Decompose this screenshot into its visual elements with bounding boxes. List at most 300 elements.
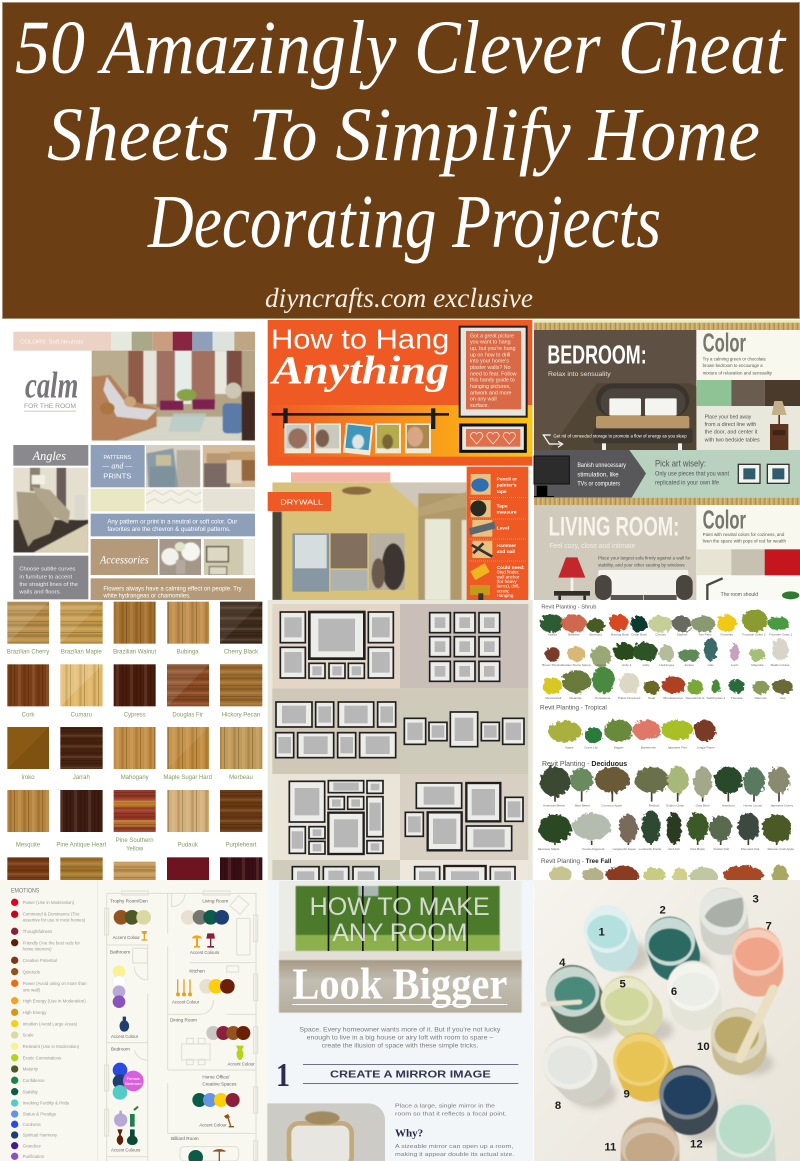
room: home office — [192, 1074, 240, 1128]
shrub labels row 2: Brown Photinia — [542, 663, 563, 667]
photo: flowers — [159, 539, 201, 575]
deciduous labels row 2: Kousa Dogwood — [582, 847, 605, 851]
step text: room so that it reflects a focal point. — [395, 1111, 507, 1117]
deciduous trees row 1 — [540, 766, 790, 802]
gallery layout 4 — [404, 712, 524, 747]
shrub labels row 1: Acacia — [548, 633, 557, 637]
tool labels: Hammer — [497, 543, 516, 549]
bed placement tip: with two bedside tables — [704, 438, 760, 444]
room: billiard room — [171, 1136, 226, 1161]
emotions legend: Exotic Connotations — [23, 1055, 61, 1060]
title: look bigger: Look Bigger — [292, 959, 507, 1008]
shrub labels row 2: Juniper — [684, 663, 694, 667]
living room heading: LIVING ROOM: — [549, 512, 679, 542]
step text: making it appear double its actual size. — [395, 1152, 515, 1158]
jar 12 — [659, 1067, 715, 1119]
row 2 labels — [22, 712, 260, 718]
room: bathroom: Bathroom — [110, 950, 130, 955]
emotions legend: Coolness — [23, 1122, 41, 1127]
emotions legend: Stability — [23, 1089, 39, 1094]
room: billiard room: Billiard Room — [171, 1136, 199, 1141]
room: bedroom: Bedroom — [125, 1081, 142, 1086]
shrub labels row 2: Magnolia — [751, 663, 764, 667]
paint sticks — [740, 989, 773, 1058]
panel: bedroom and living room — [534, 320, 800, 600]
gallery layout 8 — [415, 866, 515, 887]
icon: monitor — [534, 456, 569, 497]
emotions legend: home interiors) — [23, 947, 52, 952]
row 5 swatches — [7, 857, 262, 880]
subtitle: diyncrafts.com exclusive — [265, 283, 533, 313]
accessories text: Flowers always have a calming effect on people. Try — [103, 586, 242, 592]
emotions legend: Scale — [23, 1033, 34, 1038]
tips band: TVs or computers — [577, 481, 621, 488]
paint jars — [543, 888, 782, 1161]
row 4 labels: Yellow — [126, 847, 144, 853]
tips band: Banish unnecessary — [577, 462, 627, 469]
room: kitchen: Accent Colour — [172, 1000, 200, 1005]
row 3 swatches — [7, 727, 262, 769]
row 3 labels: Merbeau — [229, 775, 253, 781]
shrub labels row 2: Holly — [643, 663, 650, 667]
shrub labels row 3: Sweetshrub D. — [685, 696, 705, 700]
frame: intro: this handy guide to — [470, 378, 515, 384]
shrub labels row 1: Forsythia — [720, 633, 733, 637]
shrub labels row 3 — [545, 696, 786, 700]
icon: lamp and table — [770, 401, 788, 450]
living room colour card: Paint with neutral colors for coziness, and — [703, 532, 785, 537]
shrub labels row 3: Viburnum — [754, 696, 768, 700]
shrub labels row 1: Century — [655, 633, 666, 637]
shrub labels row 3: Switchgrass 3 — [706, 696, 725, 700]
tool labels: (for heavy — [497, 579, 517, 584]
emotions legend: Status & Prestige — [23, 1112, 57, 1117]
room: kitchen — [172, 969, 235, 1005]
row 4 labels: Purpleheart — [226, 842, 257, 848]
room: living room: Accent Colours — [190, 950, 219, 955]
living room block — [534, 505, 696, 600]
room: living room: Living Room — [202, 899, 228, 904]
patterns and prints heading — [91, 445, 145, 487]
row 1 labels: Cherry Black — [224, 649, 258, 655]
curtain rod with photos — [272, 408, 449, 455]
room: trophy room — [110, 899, 151, 941]
intro text — [299, 1027, 500, 1049]
panel: paint jars photo — [534, 880, 800, 1161]
row 1 labels — [7, 649, 258, 655]
sofa tip: Place your largest sofa firmly against a wall for — [598, 556, 691, 561]
emotions legend: Creative Potential — [23, 958, 57, 963]
bed placement tip: the door, and center it — [705, 430, 758, 436]
heading script: Anything — [269, 347, 449, 392]
frame: intro — [460, 327, 527, 417]
accessories heading — [91, 539, 158, 575]
shrub labels row 2: Holly 2 — [622, 663, 632, 667]
angles text: the straight lines of the — [19, 582, 78, 588]
deciduous labels row 2: Red Maple — [690, 847, 705, 851]
bedroom colour card: Try a calming green or chocolate — [703, 357, 767, 362]
living room colour card: The room should — [721, 592, 758, 598]
tool labels: measure — [497, 509, 517, 515]
frame: intro: up on how to drill — [470, 352, 510, 358]
tree fall row — [549, 865, 788, 885]
photo: wall frames — [204, 539, 255, 575]
shrub labels row 2 — [542, 663, 790, 667]
shrub labels row 2: Hibiscus — [595, 663, 607, 667]
living room colour card: liven the space with pops of red for wealth — [703, 539, 787, 544]
deciduous labels row 2 — [537, 847, 794, 851]
jar 1 — [584, 905, 631, 953]
angles text: walls and floors. — [18, 589, 62, 595]
room: living room — [181, 899, 229, 955]
layout cell backgrounds — [272, 604, 528, 880]
emotions legend: Purification — [23, 1154, 45, 1159]
intro text: create the illusion of space with these simple tricks. — [322, 1043, 479, 1049]
shrub labels row 3: Oleander — [569, 696, 582, 700]
emotions legend: High Energy — [23, 1010, 47, 1015]
panel: how to hang anything — [268, 320, 532, 600]
living room colour card — [697, 504, 800, 600]
tropical labels: Bottlebrush — [641, 746, 656, 750]
emotions legend: Restraint (Use in Moderation) — [23, 1044, 80, 1049]
tips band: replicated in your own life — [655, 480, 719, 487]
living room subheading: Feel cozy, close and intimate — [549, 541, 635, 550]
gallery layout 6 — [405, 783, 523, 851]
row 3 labels: Iroko — [21, 775, 35, 781]
emotions legend: Maturity — [23, 1067, 39, 1072]
frame: intro: you want to hang — [470, 340, 511, 346]
deciduous labels row 1: Hawthorn — [722, 804, 735, 808]
calm heading — [24, 364, 78, 412]
row 4 labels: Pine Antique Heart — [56, 842, 107, 848]
shrub labels row 3: Yew — [780, 696, 786, 700]
step heading: CREATE A MIRROR IMAGE — [330, 1070, 491, 1081]
shrub labels row 1: Fountain Grass 2 — [742, 633, 766, 637]
emotions legend — [11, 899, 87, 1160]
room: bathroom — [110, 950, 139, 1039]
deciduous labels row 2: Lombardy Poplar — [639, 847, 661, 851]
jar numbers: 1 — [599, 927, 605, 939]
row 4 swatches — [7, 790, 262, 832]
bed placement tip: Place your bed away — [705, 414, 751, 420]
tropical labels: Jungle Flame — [697, 746, 715, 750]
frame: hearts — [461, 425, 525, 451]
emotions legend: Friendly (Are the best reds for — [23, 940, 80, 945]
bedroom colour card — [697, 328, 800, 406]
room: kitchen: Kitchen — [189, 969, 205, 974]
living room colour card: Color — [703, 504, 746, 534]
angles text: Choose subtle curves — [19, 566, 75, 572]
room: dining room — [170, 1018, 255, 1067]
pink tape — [291, 472, 390, 482]
deciduous labels row 1: Japanese Cherry — [770, 804, 794, 808]
row 4 labels — [16, 838, 257, 853]
shrubs row 1 — [540, 609, 789, 633]
orange hero — [268, 320, 532, 466]
emotions legend: Grandeur — [23, 1143, 42, 1148]
tips band: Only use pieces that you want — [655, 471, 729, 478]
room: trophy room: Trophy Room/Den — [110, 899, 148, 904]
frame: intro: plaster walls? No — [470, 365, 511, 371]
photo: pillows — [202, 445, 255, 488]
drywall label — [268, 492, 331, 511]
emotions legend: assertive for use in most homes) — [23, 918, 86, 923]
jar numbers: 4 — [559, 957, 566, 969]
deciduous labels row 1: Redbud — [649, 804, 660, 808]
icon: red lamp — [554, 557, 590, 600]
tool labels: and nail — [497, 549, 515, 555]
row 2 labels: Cypress — [124, 712, 146, 718]
frame: intro: into your home's — [470, 359, 509, 365]
emotions legend: Thoughtfulness — [23, 929, 52, 934]
room: bedroom — [111, 1047, 144, 1153]
row 2 swatches — [7, 664, 262, 706]
deciduous labels row 1: Honey Locust — [743, 804, 762, 808]
step text: A sizeable mirror can open up a room, — [395, 1144, 514, 1150]
accessories text: white hydrangeas or chamomiles. — [102, 594, 191, 600]
panel: colour emotions floor plan — [0, 880, 268, 1161]
photo: striped chair — [146, 445, 200, 488]
patterns text — [91, 514, 255, 536]
wood strip — [534, 498, 800, 505]
intro text: Space. Every homeowner wants more of it. But if you're not lucky — [299, 1027, 500, 1033]
photo: drywall room — [272, 482, 467, 600]
hero photo — [279, 881, 522, 1013]
accessories heading: Accessories — [99, 552, 149, 566]
heading: shrub: Revit Planting - Shrub — [541, 605, 596, 611]
emotions legend: Command & Dominance (Too — [23, 911, 80, 916]
emotions legend: Power (Avoid using on more than — [23, 981, 87, 986]
row 1 labels: Brazilian Walnut — [113, 649, 157, 655]
jar 4 — [546, 967, 599, 1017]
shrubs row 2 — [545, 638, 789, 667]
jar numbers: 7 — [766, 920, 772, 932]
jar numbers: 6 — [671, 986, 677, 998]
deciduous labels row 2: Shumard Oak — [741, 847, 760, 851]
tool labels: Stud finder, — [497, 570, 519, 575]
patterns text: favorites are the chevron & quatrefoil patterns. — [107, 527, 231, 533]
mirror photo — [268, 1103, 385, 1161]
art frames — [738, 464, 789, 483]
icon: bed — [593, 383, 693, 450]
jar numbers — [555, 894, 772, 1154]
bedroom colour card: Color — [703, 328, 746, 358]
tool labels — [497, 477, 525, 598]
deciduous labels row 1: Blue Beech — [575, 804, 591, 808]
panel: calm for the room — [13, 332, 255, 600]
row 2 labels: Hickory Pecan — [222, 712, 260, 718]
colour bar: COLORS: Soft Neutrals — [20, 339, 84, 345]
shrubs row 3 — [542, 667, 793, 695]
deciduous labels row 1 — [543, 804, 794, 808]
emotions legend: Invoking Fertility & Pride — [23, 1101, 70, 1106]
jar numbers: 5 — [620, 978, 626, 990]
gallery layout 1 — [280, 612, 393, 678]
heading: How to Hang — [271, 323, 449, 354]
room: home office: Home Office/ — [202, 1074, 230, 1079]
patterns text: Any pattern or print in a neutral or soft color. Our — [107, 519, 237, 525]
panel: hardwood species — [7, 602, 262, 880]
row 3 labels: Maple Sugar Hard — [163, 775, 212, 781]
tool labels: wall anchor — [497, 574, 520, 579]
tropical labels: Dagger — [614, 746, 624, 750]
row 1 swatches — [7, 602, 262, 644]
jar numbers: 11 — [604, 1142, 616, 1154]
deciduous labels row 1: Gray Birch — [696, 804, 710, 808]
room: dining room: Accent Colour — [227, 1062, 255, 1067]
frame: intro: Got a great picture — [470, 333, 514, 339]
photo: living room — [92, 350, 255, 441]
tool labels: screw, — [497, 588, 509, 593]
frame: intro: up, but you're hung — [470, 346, 515, 352]
tips band: stimulation, like — [577, 471, 619, 478]
angles heading — [13, 445, 88, 466]
tool labels: tape — [497, 489, 507, 495]
room: trophy room: Accent Colour — [113, 935, 140, 940]
heading: deciduous: Revit Planting - Deciduous — [542, 761, 627, 768]
emotions legend: Power (Use in Moderation) — [23, 900, 75, 905]
step number: 1 — [276, 1057, 290, 1094]
shrub labels row 2: Lilac — [708, 663, 714, 667]
shrub labels row 1: Barberry — [568, 633, 580, 637]
intro text: enough to live in a big house or airy loft with room to spare – — [307, 1036, 494, 1042]
deciduous labels row 1: American Beech — [543, 804, 565, 808]
bed placement tip: from a direct line with — [705, 422, 756, 428]
shrub labels row 2: Lupin — [731, 663, 739, 667]
tool labels: items), drill, — [497, 584, 520, 589]
tropical labels: Japanese Fern — [667, 746, 688, 750]
shrub labels row 3: Ponsettena — [595, 696, 611, 700]
jar numbers: 9 — [624, 1088, 630, 1100]
tropical labels — [565, 746, 715, 750]
icon: arrow — [543, 435, 563, 447]
step text: Place a large, single mirror in the — [395, 1103, 495, 1109]
angles text: in furniture to accent — [19, 574, 73, 580]
tool labels: Hanging — [497, 593, 514, 598]
emotions legend: Intuition (Avoid Large Areas) — [23, 1021, 78, 1026]
bedroom colour card: mixture of relaxation and sensuality — [703, 370, 773, 375]
shrub labels row 2: Golden Flame Spirea — [562, 663, 591, 667]
jar numbers: 12 — [690, 1138, 703, 1150]
tool labels: Level — [497, 526, 509, 532]
step text — [395, 1103, 515, 1158]
shrub labels row 3: Rhododendron — [663, 696, 684, 700]
tips band: Pick art wisely: — [655, 459, 706, 469]
bed placement tip — [697, 401, 800, 450]
jar 10 — [711, 1008, 766, 1062]
tool icons — [469, 474, 496, 600]
row 1 labels: Brazilian Maple — [61, 649, 102, 655]
shrub labels row 1: Fan Palm — [699, 633, 712, 637]
frame: intro: surface. — [470, 403, 489, 409]
jar 9 — [613, 1034, 668, 1086]
tool labels: Tape — [497, 503, 508, 509]
icon: sofa — [595, 570, 693, 600]
patterns and prints heading: PRINTS — [103, 472, 131, 481]
tropical labels: Agave — [565, 746, 574, 750]
bedroom block — [534, 330, 696, 450]
deciduous labels row 2: Largetooth Aspen — [613, 847, 636, 851]
storage tip: Get rid of unneeded storage to promote a flow of energy as you sleep — [553, 433, 687, 438]
shrub labels row 1: Burning Bush — [611, 633, 629, 637]
row 1 labels: Brazilian Cherry — [7, 649, 49, 655]
calm heading: calm — [25, 364, 78, 405]
deciduous labels row 2: Japanese Maple — [537, 847, 560, 851]
jar 3 — [699, 888, 747, 935]
jar 6 — [667, 963, 719, 1011]
emotions heading: EMOTIONS — [11, 888, 39, 894]
panel: gallery wall layouts — [265, 600, 535, 887]
patterns and prints heading: — and — — [101, 461, 133, 470]
tool labels: Pencil or — [497, 477, 517, 483]
room: bathroom: Accent Colour — [111, 1034, 139, 1039]
top strip — [534, 320, 800, 330]
colour bar — [13, 332, 255, 351]
emotions legend: Spiritual Harmony — [23, 1133, 58, 1138]
shrub labels row 3: Mexicanbell — [545, 696, 562, 700]
deciduous labels row 2: Red Ash — [668, 847, 680, 851]
jar 5 — [601, 978, 653, 1026]
tips band — [534, 450, 800, 498]
row 3 labels: Jarrah — [73, 775, 90, 781]
angles heading: Angles — [32, 449, 66, 463]
shrub labels row 3: Prairie Dropseed — [618, 696, 641, 700]
jar numbers: 10 — [697, 1041, 710, 1053]
room: bedroom: Bedroom — [111, 1047, 130, 1052]
shrub labels row 2: Hydrangea — [659, 663, 674, 667]
floor plan walls — [105, 891, 258, 1161]
cover bottom overflow — [265, 880, 535, 887]
deciduous trees row 2 — [538, 811, 791, 845]
jar 2 — [645, 918, 695, 966]
heading: tree fall: Revit Planting - Tree Fall — [541, 858, 612, 865]
shrub labels row 1: Boxwood — [589, 633, 602, 637]
bedroom subheading: Relax into sensuality — [548, 371, 611, 378]
row 2 labels: Cumaru — [71, 712, 92, 718]
step text: Why? — [395, 1128, 423, 1140]
photo: chairs — [13, 468, 88, 553]
panel: how to make any room look bigger — [268, 881, 533, 1161]
row 3 labels — [21, 775, 253, 781]
row 4 labels: Pine Southern — [116, 838, 154, 844]
title: Decorating Projects — [147, 180, 661, 264]
drywall label: DRYWALL — [280, 498, 323, 507]
shrub labels row 1: Fountain Grass 1 — [769, 633, 793, 637]
tropical labels: Crane Lily — [584, 746, 598, 750]
row 2 labels: Douglas Fir — [172, 712, 203, 718]
swatches: patterns — [91, 489, 255, 511]
deciduous labels row 1: Golden Chain — [666, 804, 684, 808]
frame: intro: need to fear. Follow — [470, 371, 517, 377]
gallery layout 2 — [430, 613, 500, 681]
row 2 labels: Cork — [22, 712, 34, 718]
frame: intro: hanging pictures, — [470, 384, 511, 390]
header banner — [2, 2, 800, 319]
jar numbers: 8 — [555, 1100, 561, 1112]
jar 7 — [732, 929, 782, 976]
room: bedroom: Accent Colours — [111, 1148, 140, 1153]
accessories text — [91, 578, 255, 600]
shrub labels row 3: Thevetia — [731, 696, 743, 700]
gallery layout 3 — [276, 702, 396, 758]
deciduous labels row 2: Siberian Crab Apple — [767, 847, 794, 851]
title: Sheets To Simplify Home — [47, 93, 760, 177]
shrub labels row 1 — [548, 633, 793, 637]
frame: intro: artwork and more — [470, 390, 511, 396]
shrub labels row 1: Cedar Bush — [631, 633, 647, 637]
shrub labels row 2: Maiden Grass — [771, 663, 790, 667]
jar 11 — [621, 1123, 679, 1161]
